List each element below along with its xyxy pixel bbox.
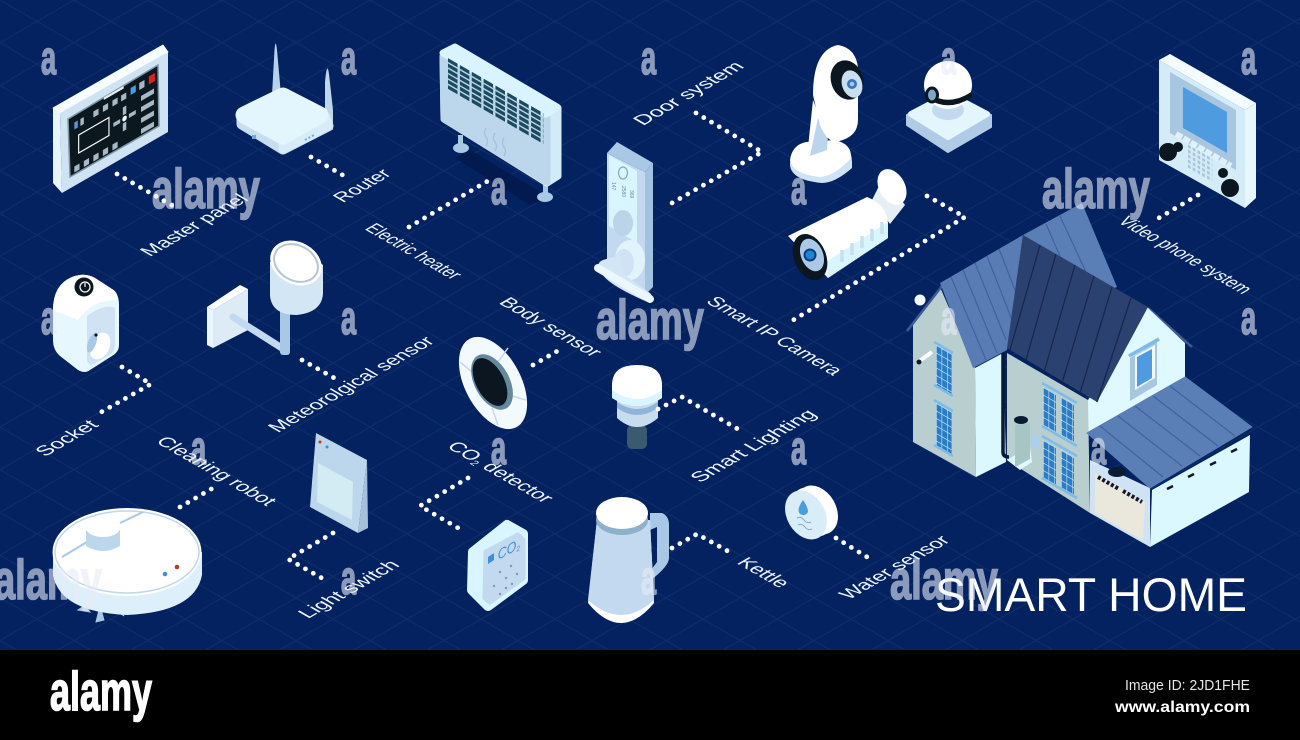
watermark overlay: a [491,422,507,475]
connector: router [311,157,346,177]
label: Video phone system: Video phone system [1113,213,1257,297]
back roof [1023,203,1117,310]
dark front roof [1007,235,1148,402]
garage side wall [1150,435,1250,547]
watermark overlay: a [341,552,357,605]
connector: master panel [117,174,173,206]
device: water sensor [777,478,846,547]
device: CO2 detector: 2 [515,545,520,554]
watermark overlay: a [1241,292,1257,345]
watermark overlay: alamy [890,550,998,612]
left eave [907,286,942,331]
side wall [975,353,1006,477]
watermark overlay: a [941,292,957,345]
device: light switch [310,433,368,533]
device: cleaning robot [52,508,202,622]
garage vents [1167,449,1237,489]
device: door lock: 2580 [620,186,626,197]
connector: socket [96,367,151,415]
device: home camera [790,45,868,183]
watermark overlay: a [41,32,57,85]
label: Kettle: Kettle [732,554,795,591]
illustration: house [907,203,1252,547]
label: Smart Lighting: Smart Lighting [685,406,822,486]
watermark overlay: a [191,422,207,475]
device: smart light bulb [612,365,662,449]
device: master panel [53,45,168,193]
label: CO2 detector: detector [472,456,559,506]
device: bullet camera [786,164,912,285]
label: Electric heater: Electric heater [360,220,467,283]
device: meteorological sensor [207,232,330,355]
garage door [1095,473,1145,540]
label: Meteorolgical sensor: Meteorolgical sensor [263,333,440,436]
right eave [1148,308,1192,347]
device: video phone [1159,54,1256,208]
connector: electric heater [409,178,493,227]
label: Smart IP Camera: Smart IP Camera [701,293,848,379]
device: CO2 detector [472,525,523,606]
watermark overlay: a [641,552,657,605]
wall cameras [914,294,932,364]
device: dome camera [907,61,991,152]
label: Router: Router [328,166,397,206]
connector: door system [672,113,762,203]
label: Door system: Door system [628,58,750,129]
left wall lower window [934,400,953,456]
device: router [242,44,333,149]
left wall upper window [934,342,953,396]
site url: www.alamy.com [1114,699,1250,716]
drain pipe [1003,353,1009,457]
garage lamp [1108,467,1126,477]
dormer window [1129,339,1159,401]
garage front [1090,460,1150,547]
front door porch [1007,416,1040,470]
watermark overlay: a [41,292,57,345]
connector: smart IP camera [790,196,965,322]
garage roof [1087,377,1252,488]
watermark overlay: alamy [596,290,704,352]
front wall [1007,353,1090,513]
footer bar [0,650,1300,740]
label: CO2 detector: CO [442,438,486,464]
watermark overlay: a [641,32,657,85]
watermark overlay [0,32,1257,612]
watermark overlay: a [341,292,357,345]
connector: kettle [672,534,733,554]
device: door lock: 147 [610,182,616,191]
image id: Image ID: 2JD1FHE [1125,677,1250,694]
label: Cleaning robot: Cleaning robot [151,433,282,509]
label: Water sensor: Water sensor [834,532,956,603]
label: Body sensor: Body sensor [494,294,608,360]
watermark overlay: a [1241,32,1257,85]
left gable wall [913,287,976,477]
label: Socket: Socket [30,417,104,460]
watermark overlay: a [491,162,507,215]
connector: cleaning robot [180,488,213,507]
label: Light switch: Light switch [293,557,405,622]
device: door lock [598,142,653,303]
watermark overlay: alamy [152,159,260,221]
device: electric heater [443,47,558,205]
device: body sensor [445,326,541,440]
device: socket [53,275,119,372]
label: Master panel: Master panel [135,191,254,260]
watermark overlay: alamy [1042,159,1150,221]
connector: smart lighting [658,397,743,432]
watermark overlay: a [1091,422,1107,475]
left roof [940,235,1023,368]
connector: video phone system [1152,195,1198,222]
watermark overlay: a [341,32,357,85]
connector: water sensor [836,538,867,557]
watermark overlay: a [791,422,807,475]
device: CO2 detector: CO [497,537,517,563]
connector: meteorological sensor [302,360,336,379]
right upper wall [1088,307,1185,432]
title: SMART HOME [935,568,1247,621]
connector: CO2 detector [420,478,468,532]
connector: light switch [288,533,333,581]
device: door lock: 369 [628,190,634,199]
front lower windows [1042,436,1077,498]
label: CO2 detector: 2 [467,459,481,468]
front upper windows [1042,383,1077,446]
footer logo: alamy [50,660,152,722]
watermark overlay: a [791,162,807,215]
device: kettle [588,497,669,623]
watermark overlay: a [941,32,957,85]
connector: body sensor [533,349,561,365]
